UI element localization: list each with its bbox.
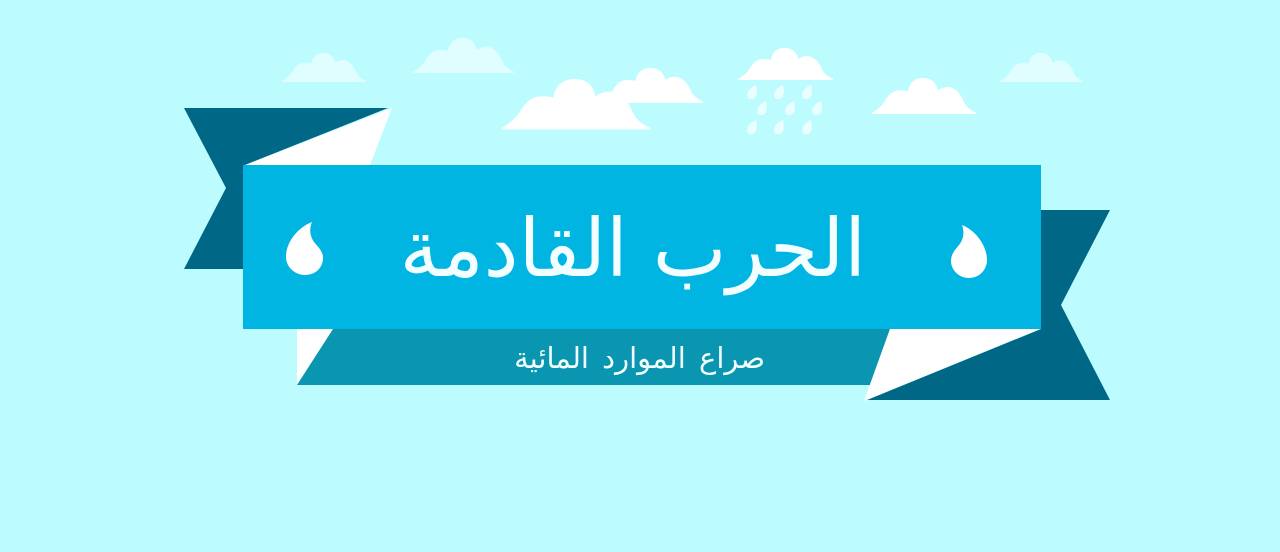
cloud: faint far right bbox=[1000, 53, 1083, 82]
ribbon fold: lower left white bbox=[297, 329, 334, 385]
cloud: large centre bbox=[502, 79, 650, 129]
ribbon tail: upper left bbox=[184, 108, 388, 269]
clouds group bbox=[282, 38, 1083, 129]
cloud: rain cloud bbox=[738, 48, 833, 80]
cloud: right white bbox=[872, 78, 976, 114]
cloud: medium behind large bbox=[600, 68, 703, 103]
icon: left water drop bbox=[286, 222, 323, 275]
subtitle: صراع الموارد المائية bbox=[514, 341, 765, 375]
ribbon tail: lower right bbox=[867, 210, 1110, 400]
subtitle band bbox=[297, 329, 890, 385]
ribbon fold: lower right white bbox=[864, 329, 1040, 401]
cloud: faint far left bbox=[282, 53, 366, 82]
ribbon fold: upper left white bbox=[245, 108, 392, 165]
main title banner bbox=[243, 165, 1041, 329]
title: الحرب القادمة bbox=[400, 201, 866, 296]
icon: right water drop bbox=[951, 225, 987, 278]
rain drops bbox=[747, 84, 822, 134]
cloud: faint upper left bbox=[413, 38, 514, 73]
